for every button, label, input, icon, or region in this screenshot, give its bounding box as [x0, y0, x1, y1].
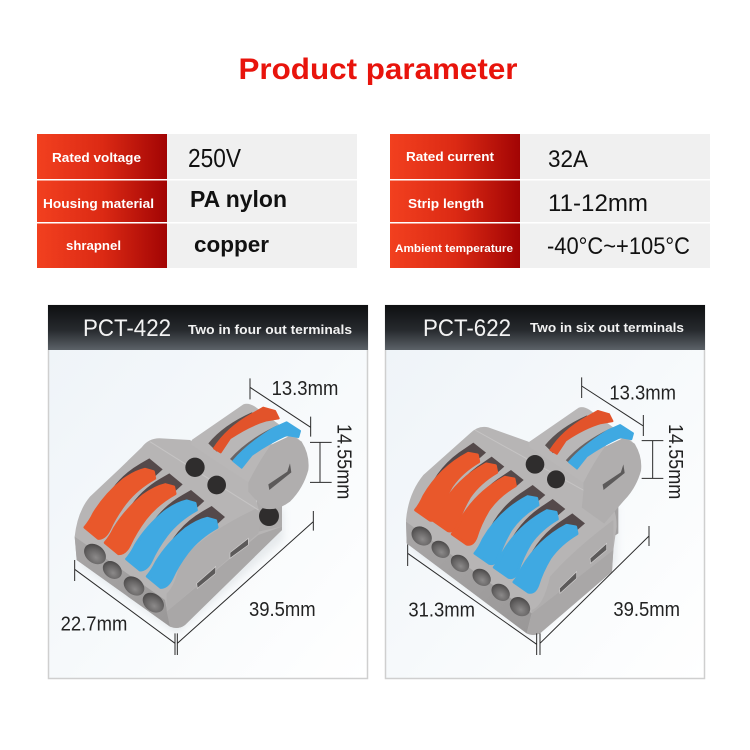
dimension labels: 13.3mm — [272, 378, 338, 400]
panel header: PCT-422: Two in four out terminals — [188, 322, 352, 337]
mounting holes — [185, 458, 279, 526]
dimension labels — [408, 382, 686, 622]
blue levers — [475, 497, 577, 592]
panel header: PCT-422: PCT-422 — [83, 315, 171, 342]
dimension labels: 14.55mm — [664, 424, 686, 499]
dimension labels: 39.5mm — [249, 599, 316, 621]
panel header: PCT-622: PCT-622 — [423, 315, 511, 342]
mounting holes — [526, 455, 565, 488]
orange levers — [416, 453, 515, 544]
row: shrapnel: shrapnel — [66, 238, 121, 253]
lever slots — [427, 443, 585, 565]
side clips — [559, 543, 607, 593]
rear hole block — [257, 493, 282, 547]
connector: PCT-422 main housing — [75, 438, 283, 633]
row: rated voltage — [52, 143, 242, 173]
row: shrapnel — [66, 232, 269, 257]
row: strip length: 11-12mm — [548, 190, 648, 217]
panel: PCT-622 — [385, 305, 705, 678]
blue levers — [127, 501, 217, 587]
row: housing material — [43, 186, 287, 212]
dimension labels: 31.3mm — [408, 600, 475, 622]
row: ambient temperature: Ambient temperature — [395, 243, 513, 255]
panel header: PCT-622 — [385, 305, 705, 350]
title: Product parameter — [238, 53, 518, 86]
front face — [75, 537, 170, 627]
dimension labels — [61, 378, 354, 636]
dimension lines — [75, 378, 332, 655]
panel header: PCT-422 — [48, 305, 368, 350]
lever slots — [100, 458, 225, 559]
row: strip length — [408, 190, 648, 217]
panel: right parameter table — [390, 134, 710, 268]
front face — [406, 522, 532, 633]
row: rated current: 32A — [548, 146, 588, 173]
row: ambient temperature: -40°C~+105°C — [547, 233, 690, 260]
row: rated voltage: 250V — [188, 143, 242, 173]
dimension labels: 22.7mm — [61, 614, 127, 636]
row: housing material: PA nylon — [190, 186, 287, 212]
PCT-622 dimension annotations — [408, 377, 686, 655]
connector: PCT-622 main housing — [406, 427, 618, 637]
row: housing material: Housing material — [43, 196, 154, 211]
panel: PCT-422 — [48, 305, 368, 678]
row: rated current: Rated current — [406, 149, 495, 164]
side dome — [167, 508, 260, 612]
panel header: PCT-622: Two in six out terminals — [530, 320, 684, 335]
row: rated voltage: Rated voltage — [52, 150, 141, 165]
dimension labels: 39.5mm — [613, 599, 680, 621]
dimension labels: 14.55mm — [332, 424, 354, 499]
connector: PCT-422 rear unit — [192, 404, 309, 509]
side clips — [197, 538, 248, 588]
connector: PCT-622 rear unit — [529, 407, 641, 524]
PCT-422 dimension annotations — [61, 378, 354, 655]
dimension labels: 13.3mm — [609, 382, 676, 404]
row: strip length: Strip length — [408, 196, 484, 211]
row: shrapnel: copper — [194, 232, 269, 257]
panel: left parameter table — [37, 134, 357, 268]
wire entry holes — [80, 540, 168, 617]
side dome — [532, 520, 613, 613]
row: rated current — [406, 146, 588, 173]
wire entry holes — [408, 522, 534, 620]
dimension lines — [408, 377, 663, 655]
orange levers — [85, 469, 175, 554]
row: ambient temperature — [395, 233, 690, 260]
